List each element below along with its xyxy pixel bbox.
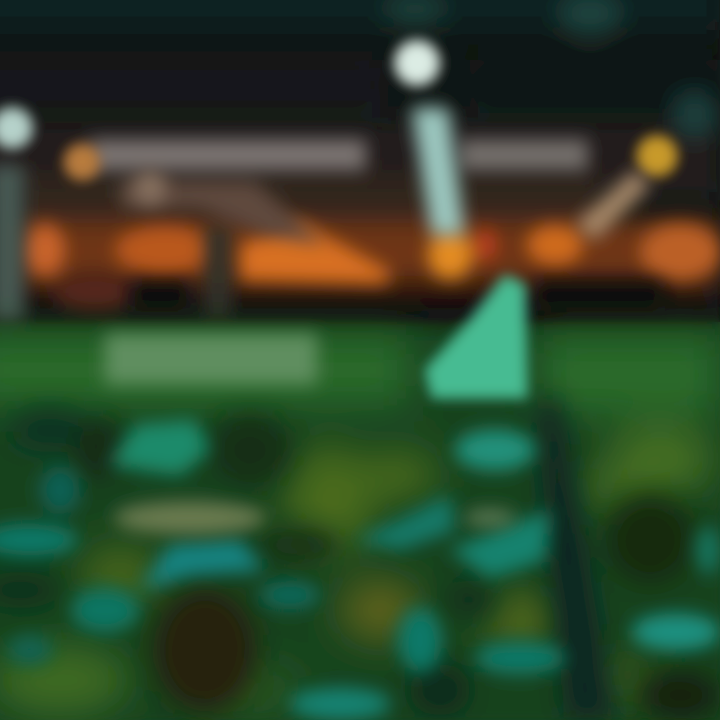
orange shapes	[25, 222, 720, 310]
white light: left	[0, 108, 32, 148]
dark posts	[0, 165, 665, 320]
lights and beam	[0, 41, 677, 240]
teal patches	[0, 420, 720, 720]
yellow light: right	[637, 136, 677, 176]
pale field highlights	[105, 334, 516, 534]
dark field shadows	[0, 400, 720, 720]
dark upper band	[0, 0, 720, 200]
diagonal beam	[575, 170, 650, 240]
pale light: centre left	[133, 171, 167, 205]
grey horizontal bars	[90, 140, 588, 245]
vertical pale beam	[412, 108, 464, 235]
teal arrow marker	[425, 275, 527, 398]
orange light: left	[64, 144, 100, 180]
orange glow band	[0, 175, 720, 318]
white light: top	[395, 41, 439, 85]
green field patches	[0, 335, 720, 715]
